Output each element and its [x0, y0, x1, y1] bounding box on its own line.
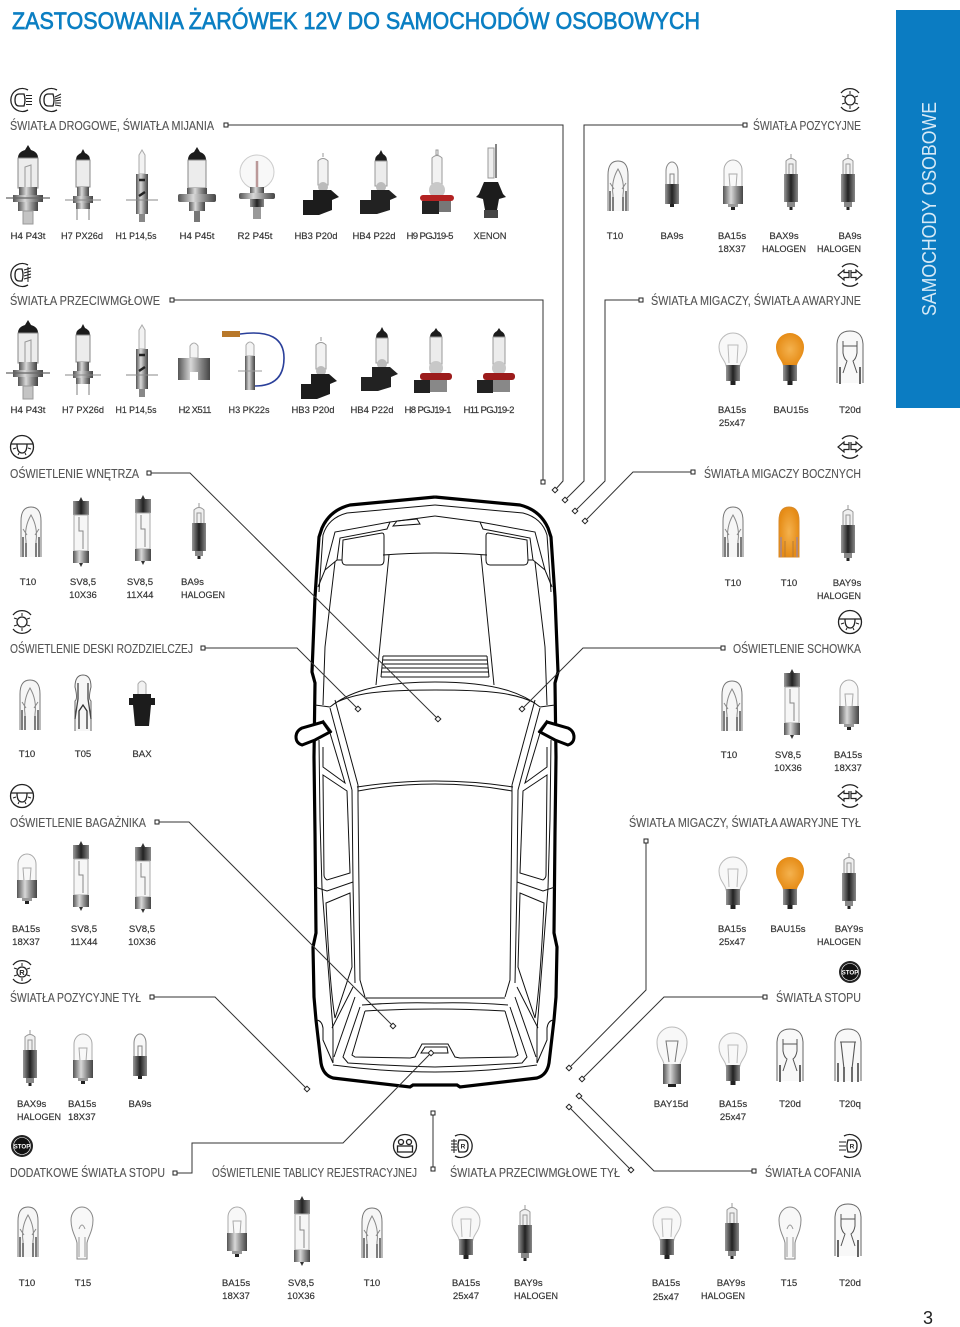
heading: rear position lights: ŚWIATŁA POZYCYJNE TYŁ [10, 990, 141, 1005]
icon: glovebox light [838, 610, 862, 634]
bulb: BA9s: BA9s [661, 231, 684, 242]
bulb: SV8,5 10X36: 10X36 [69, 590, 97, 601]
panel: rear turn signals and hazard lights [629, 785, 864, 948]
bulb: H11 PGJ19-2: H11 PGJ19-2 [464, 405, 514, 416]
bulb: H7 PX26d [62, 324, 104, 416]
icon: rear position light: R [19, 968, 25, 977]
bulb: HB4 P22d [350, 327, 398, 416]
panel: reversing lights [652, 1134, 862, 1303]
icon: high beam [11, 88, 32, 112]
bulb: H4 P45t: H4 P45t [180, 231, 215, 242]
bulb: XENON [474, 144, 507, 242]
bulb: BA15s 18X37 [718, 160, 746, 255]
bulb: BA15s 25x47: BA15s [718, 405, 746, 416]
bulb: HB3 P20d: HB3 P20d [292, 405, 334, 416]
heading: rear fog lights: ŚWIATŁA PRZECIWMGŁOWE TYŁ [450, 1165, 620, 1180]
bulb: BA9s halogen: HALOGEN [181, 590, 225, 601]
heading: interior lighting: OŚWIETLENIE WNĘTRZA [10, 466, 140, 481]
bulb: H1 P14,5s: H1 P14,5s [116, 231, 157, 242]
bulb: BAU15s: BAU15s [770, 924, 806, 935]
icon: fog light [11, 264, 31, 286]
bulb: BAY9s halogen: HALOGEN [817, 591, 861, 602]
heading: fog lights: ŚWIATŁA PRZECIWMGŁOWE [10, 293, 160, 308]
panel: dashboard lighting [10, 611, 193, 760]
bulb: T10 [20, 507, 41, 588]
bulb: BA15s 18X37: 18X37 [718, 244, 746, 255]
bulb: H4 P45t [178, 147, 216, 242]
bulb: BAX [129, 681, 155, 760]
title: ZASTOSOWANIA ŻARÓWEK 12V DO SAMOCHODÓW OSOBOWYCH [12, 8, 700, 35]
bulb: BA9s [661, 162, 684, 242]
bulb: BA15s 25x47: 25x47 [719, 937, 745, 948]
bulb: BA15s 25x47: 25x47 [719, 418, 745, 429]
icon: stop light: STOP [842, 969, 858, 976]
icon: reversing light: R [850, 1144, 855, 1150]
side tab: category [896, 10, 960, 408]
bulb: BAX9s halogen: HALOGEN [17, 1112, 61, 1123]
panel: rear position lights [10, 961, 152, 1123]
bulb: T20d [835, 1204, 861, 1289]
bulb: BA15s 25x47 [452, 1207, 480, 1302]
panel: side turn signals [704, 436, 862, 602]
bulb: H9 PGJ19-5: H9 PGJ19-5 [406, 231, 454, 242]
bulb: SV8,5 10X36: 10X36 [287, 1291, 315, 1302]
bulb: H9 PGJ19-5 [406, 150, 454, 242]
bulb: H1 P14,5s: H1 P14,5s [116, 405, 157, 416]
panel: high and low beam [6, 88, 507, 242]
bulb: T20d: T20d [839, 405, 861, 416]
panel: boot lighting [10, 784, 156, 948]
bulb: T10 amber [779, 507, 799, 589]
bulb: BA15s 18X37 [834, 680, 862, 774]
bulb: T10 [607, 161, 628, 242]
bulb: BA15s 25x47: 25x47 [453, 1291, 479, 1302]
bulb: BAU15s [770, 857, 806, 935]
bulb: H1 P14,5s [116, 325, 158, 416]
panel: licence plate lighting [212, 1134, 417, 1302]
bulb: H7 PX26d: H7 PX26d [62, 405, 104, 416]
bulb: H8 PGJ19-1 [404, 328, 452, 416]
heading: glovebox lighting: OŚWIETLENIE SCHOWKA [733, 641, 862, 656]
icon: low beam [40, 88, 61, 112]
bulb: BA15s 25x47 [652, 1207, 681, 1303]
icon: reversing light [839, 1134, 861, 1158]
bulb: T10: T10 [364, 1278, 380, 1289]
bulb: T10: T10 [721, 750, 737, 761]
panel: glovebox lighting [721, 610, 862, 774]
bulb: T15 [71, 1207, 93, 1289]
heading: reversing lights: ŚWIATŁA COFANIA [765, 1165, 862, 1180]
bulb: BAX9s halogen: HALOGEN [762, 244, 806, 255]
bulb: BAX9s halogen [762, 154, 806, 255]
bulb: T10: T10 [607, 231, 623, 242]
bulb: BA15s 18X37: BA15s [718, 231, 746, 242]
bulb: BA9s halogen [817, 154, 862, 255]
bulb: H4 P43t [6, 145, 50, 242]
bulb: SV8,5 10X36 [69, 497, 97, 601]
bulb: T10 [723, 507, 743, 589]
bulb: BA15s 18X37: 18X37 [12, 937, 40, 948]
bulb: BA9s: BA9s [129, 1099, 152, 1110]
bulb: H3 PK22s [222, 331, 284, 416]
heading: side turn signals: ŚWIATŁA MIGACZY BOCZNYCH [704, 466, 861, 481]
bulb: BA15s 18X37: 18X37 [834, 763, 862, 774]
bulb: SV8,5 10X36: 10X36 [128, 937, 156, 948]
bulb: T10 [362, 1208, 382, 1289]
bulb: BA15s 25x47: BA15s [719, 1099, 747, 1110]
bulb: BA9s halogen: BA9s [181, 577, 204, 588]
bulb: BA15s 18X37 [12, 854, 40, 948]
bulb: SV8,5 10X36: SV8,5 [775, 750, 801, 761]
bulb: BA15s 18X37: 18X37 [222, 1291, 250, 1302]
icon: rear turn signal [838, 785, 862, 807]
bulb: T10: T10 [19, 749, 35, 760]
bulb: BAY9s halogen: HALOGEN [701, 1291, 745, 1302]
bulb: T10 [19, 680, 40, 760]
bulb: SV8,5 10X36 [287, 1196, 315, 1302]
bulb: SV8,5 11X44 [70, 841, 98, 948]
bulb: BAY15d [654, 1027, 688, 1110]
bulb: BA9s [129, 1034, 152, 1110]
bulb: SV8,5 10X36: 10X36 [774, 763, 802, 774]
bulb: BAX9s halogen: BAX9s [17, 1099, 47, 1110]
bulb: H1 P14,5s [116, 150, 158, 242]
icon: stop light: STOP [14, 1143, 30, 1150]
bulb: HB4 P22d: HB4 P22d [350, 405, 394, 416]
icon: stop light [11, 1135, 33, 1157]
bulb: SV8,5 11X44: 11X44 [126, 590, 154, 601]
bulb: T20d [777, 1029, 803, 1110]
bulb: SV8,5 11X44: SV8,5 [71, 924, 97, 935]
panel: additional brake lights [10, 1135, 165, 1289]
bulb: BA9s halogen: HALOGEN [817, 244, 861, 255]
heading: boot lighting: OŚWIETLENIE BAGAŻNIKA [10, 815, 147, 830]
bulb: BAY9s halogen: HALOGEN [514, 1291, 558, 1302]
bulb: T10 [18, 1207, 38, 1289]
bulb: SV8,5 10X36: SV8,5 [288, 1278, 314, 1289]
bulb: T10: T10 [725, 578, 741, 589]
panel: turn signals and hazard lights [651, 264, 863, 429]
icon: turn signal [838, 264, 862, 286]
bulb: BAY9s halogen: BAY9s [717, 1278, 746, 1289]
bulb: SV8,5 10X36 [128, 843, 156, 948]
bulb: T15: T15 [75, 1278, 91, 1289]
icon: rear position light [13, 961, 31, 983]
bulb: SV8,5 10X36: SV8,5 [70, 577, 96, 588]
bulb: BA15s 25x47: BA15s [652, 1278, 680, 1289]
bulb: BA15s 18X37: BA15s [222, 1278, 250, 1289]
heading: rear turn signals: ŚWIATŁA MIGACZY, ŚWIATŁA AWARYJNE TYŁ [629, 815, 861, 830]
bulb: H3 PK22s: H3 PK22s [228, 405, 270, 416]
icon: interior light [10, 436, 34, 458]
side tab: category: SAMOCHODY OSOBOWE [919, 102, 941, 316]
car top view diagram [296, 497, 574, 1087]
icon: rear fog light: R [461, 1144, 466, 1150]
heading: position lights: ŚWIATŁA POZYCYJNE [753, 118, 861, 133]
panel: rear fog lights [450, 1134, 620, 1302]
bulb: BAY9s halogen [817, 505, 862, 602]
bulb: HB3 P20d: HB3 P20d [294, 231, 338, 242]
bulb: R2 P45t [238, 155, 275, 242]
bulb: BAY9s halogen: BAY9s [833, 578, 862, 589]
bulb: BAY9s halogen: BAY9s [514, 1278, 543, 1289]
bulb: T20q: T20q [839, 1099, 861, 1110]
bulb: XENON: XENON [474, 231, 507, 242]
bulb: BAX9s halogen [17, 1030, 61, 1123]
icon: licence plate light [394, 1134, 416, 1158]
heading: additional brake lights: DODATKOWE ŚWIATŁA STOPU [10, 1165, 165, 1180]
bulb: BAU15s [773, 333, 809, 416]
bulb: BAX9s halogen: BAX9s [769, 231, 799, 242]
bulb: BA15s 25x47 [719, 1033, 747, 1123]
bulb: BA15s 25x47: 25x47 [720, 1112, 746, 1123]
bulb: SV8,5 11X44 [126, 495, 154, 601]
bulb: T15 [779, 1207, 801, 1289]
bulb: T20q [835, 1029, 861, 1110]
bulb: BA15s 18X37: BA15s [12, 924, 40, 935]
heading: licence plate lighting: OŚWIETLENIE TABLICY REJESTRACYJNEJ [212, 1165, 417, 1180]
leader lines and connectors [147, 123, 767, 1175]
icon: boot light [10, 784, 34, 808]
bulb: BA15s 18X37 [68, 1034, 96, 1123]
bulb: BAY9s halogen: BAY9s [835, 924, 864, 935]
bulb: T10 [721, 681, 742, 761]
bulb: BAU15s: BAU15s [773, 405, 809, 416]
bulb: BA15s 18X37 [222, 1207, 250, 1302]
bulb: T20d: T20d [779, 1099, 801, 1110]
bulb: SV8,5 10X36 [774, 669, 802, 774]
bulb: BAY9s halogen [817, 853, 864, 948]
panel: interior lighting [10, 436, 225, 601]
bulb: R2 P45t: R2 P45t [238, 231, 273, 242]
bulb: T20d: T20d [839, 1278, 861, 1289]
bulb: HB4 P22d [352, 150, 397, 242]
heading: brake lights: ŚWIATŁA STOPU [776, 990, 861, 1005]
bulb: H8 PGJ19-1: H8 PGJ19-1 [404, 405, 452, 416]
bulb: H11 PGJ19-2 [464, 328, 515, 416]
bulb: BAX: BAX [132, 749, 152, 760]
bulb: T10 amber: T10 [781, 578, 797, 589]
bulb: H4 P43t [6, 320, 50, 416]
bulb: BAY9s halogen [514, 1205, 558, 1302]
bulb: BA15s 18X37: BA15s [834, 750, 862, 761]
bulb: BA9s halogen [181, 503, 225, 601]
bulb: T20d [837, 331, 863, 416]
panel: position lights [607, 89, 862, 255]
icon: stop light [839, 961, 861, 983]
bulb: BA15s 25x47: BA15s [718, 924, 746, 935]
icon: position light [841, 89, 859, 111]
bulb: T05: T05 [75, 749, 91, 760]
bulb: SV8,5 11X44: SV8,5 [127, 577, 153, 588]
bulb: SV8,5 11X44: 11X44 [70, 937, 98, 948]
icon: dashboard light [13, 611, 31, 633]
heading: turn signals: ŚWIATŁA MIGACZY, ŚWIATŁA AWARYJNE [651, 293, 861, 308]
bulb: H7 PX26d: H7 PX26d [61, 231, 103, 242]
bulb: HB4 P22d: HB4 P22d [352, 231, 396, 242]
bulb: H4 P43t: H4 P43t [10, 231, 46, 242]
bulb: BA15s 25x47: BA15s [452, 1278, 480, 1289]
bulb: T05 [75, 675, 91, 760]
bulb: H2 X511 [178, 343, 212, 416]
bulb: BA9s halogen: BA9s [839, 231, 862, 242]
bulb: BAY9s halogen [701, 1203, 746, 1302]
heading: high and low beam: ŚWIATŁA DROGOWE, ŚWIATŁA MIJANIA [10, 118, 215, 133]
bulb: BA15s 25x47: 25x47 [653, 1292, 679, 1303]
bulb: BA15s 18X37: 18X37 [68, 1112, 96, 1123]
panel: fog lights [6, 264, 515, 416]
bulb: BAY9s halogen: HALOGEN [817, 937, 861, 948]
bulb: BAY15d: BAY15d [654, 1099, 688, 1110]
bulb: SV8,5 10X36: SV8,5 [129, 924, 155, 935]
bulb: T10: T10 [20, 577, 36, 588]
panel: brake lights [654, 961, 861, 1123]
bulb: HB3 P20d [292, 337, 337, 416]
bulb: BA15s 25x47 [718, 333, 747, 429]
bulb: HB3 P20d [294, 153, 339, 242]
bulb: BA15s 25x47 [718, 857, 747, 948]
bulb: H7 PX26d [61, 149, 103, 242]
bulb: H2 X511: H2 X511 [178, 405, 212, 416]
icon: rear fog light [451, 1134, 472, 1158]
heading: dashboard lighting: OŚWIETLENIE DESKI ROZDZIELCZEJ [10, 641, 193, 656]
bulb: BA15s 18X37: BA15s [68, 1099, 96, 1110]
bulb: T15: T15 [781, 1278, 797, 1289]
bulb: H4 P43t: H4 P43t [10, 405, 46, 416]
icon: side turn signal [838, 436, 862, 458]
bulb: T10: T10 [19, 1278, 35, 1289]
